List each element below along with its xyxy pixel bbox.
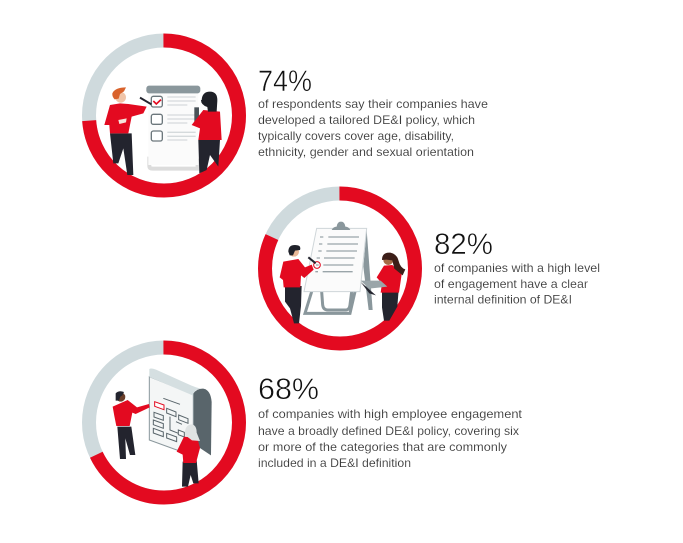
description: 82%: internal definition of DE&I bbox=[434, 292, 572, 306]
illustration: two people with flipchart bbox=[280, 222, 405, 323]
description: 74%: ethnicity, gender and sexual orientation bbox=[258, 145, 474, 159]
stat number: 68%: 68% bbox=[258, 373, 319, 406]
illustration: two people with checklist bbox=[104, 86, 222, 175]
description: 82%: of engagement have a clear bbox=[434, 277, 588, 291]
description: 74%: of respondents say their companies have bbox=[258, 97, 488, 111]
stat number: 74%: 74% bbox=[258, 65, 312, 98]
panel: 82% statistic bbox=[265, 194, 603, 344]
panel: 74% statistic bbox=[89, 40, 491, 190]
description: 74%: typically covers cover age, disability, bbox=[258, 129, 454, 143]
description: 68%: of companies with high employee engagement bbox=[258, 407, 523, 421]
donut chart: 74% bbox=[89, 40, 239, 190]
illustration: two people with process chart bbox=[113, 368, 212, 487]
description: 68%: have a broadly defined DE&I policy, covering six bbox=[258, 424, 519, 438]
stat number: 82%: 82% bbox=[434, 228, 493, 261]
donut chart: 68% bbox=[89, 348, 239, 498]
description: 74%: developed a tailored DE&I policy, which bbox=[258, 113, 475, 127]
description: 82%: of companies with a high level bbox=[434, 261, 600, 275]
description: 68%: or more of the categories that are commonly bbox=[258, 440, 507, 454]
panel: 68% statistic bbox=[89, 348, 525, 498]
donut chart: 82% bbox=[265, 194, 415, 344]
description: 68%: included in a DE&I definition bbox=[258, 456, 411, 470]
